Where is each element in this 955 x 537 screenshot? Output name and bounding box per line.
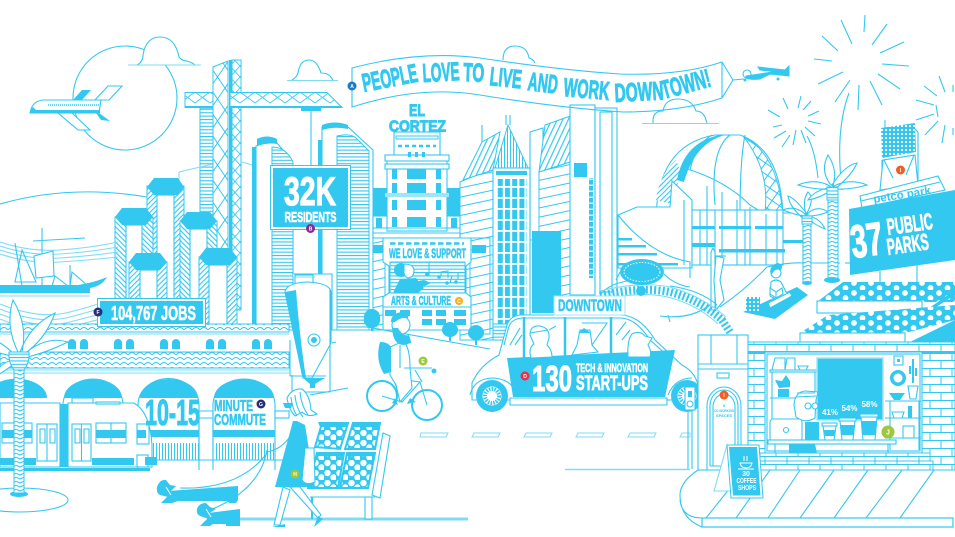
label: 10-15 minute commute: COMMUTE: [214, 412, 266, 429]
El Cortez lettering: EL: [409, 101, 425, 120]
musician: [393, 262, 458, 293]
road edge lines: [240, 470, 690, 519]
curb line with trees: [364, 309, 490, 349]
coffee cups chart: 41%: [822, 408, 838, 417]
passengers: [510, 322, 652, 358]
airplane: [30, 86, 122, 130]
bus: 130: [532, 358, 572, 399]
coworking door: [698, 335, 748, 470]
El Cortez lettering: CORTEZ: [389, 118, 446, 136]
Petco Park scoreboard: petco park: [873, 185, 932, 206]
sign: 32K residents: [270, 166, 350, 233]
banner: LIVE: [488, 61, 523, 94]
coworking door: CO-WORKING: [714, 408, 734, 413]
sign: arts and culture: ARTS & CULTURE: [391, 294, 451, 308]
lamp post: [711, 248, 726, 310]
dog: long dachshund: [157, 480, 238, 503]
bus: START-UPS: [576, 372, 648, 395]
cloud: upper left: [128, 37, 201, 65]
laptop: [770, 419, 802, 441]
shop shelves and decor: [770, 356, 921, 450]
sun: [73, 46, 177, 150]
palm tree: tall: [798, 155, 867, 283]
label: downtown: DOWNTOWN: [558, 296, 622, 315]
sign: 37 public parks: [847, 190, 955, 284]
El Cortez lettering: [389, 101, 446, 136]
Petco Park scoreboard: I: [900, 168, 902, 174]
coffee cups chart: [822, 400, 894, 440]
counter: [768, 440, 896, 453]
leashes: [180, 450, 268, 510]
banner: A: [350, 84, 354, 90]
planter: lower: [800, 305, 955, 342]
water waves: [0, 242, 118, 330]
banner: LOVE: [422, 56, 460, 88]
coworking door: 6: [723, 403, 726, 408]
cloud: right of banner: [642, 99, 719, 124]
barista: [794, 391, 819, 440]
hexagonal towers: [115, 178, 237, 326]
sign: arts and culture: [383, 238, 471, 330]
sailing ship: [0, 228, 107, 296]
planter: upper: [817, 282, 955, 314]
station backdrop: brick roofline: [0, 324, 289, 471]
bus: D: [523, 374, 527, 380]
label: 10-15 minute commute: G: [259, 402, 263, 408]
banner: WORK: [562, 72, 611, 106]
side walls of arts building: [373, 238, 490, 334]
sign: 104,767 jobs: F: [96, 310, 100, 316]
cyclist: [367, 312, 442, 420]
A-frame coffee sign: SHOPS: [738, 485, 756, 492]
tower crane: [179, 60, 342, 310]
sign: 104,767 jobs: 104,767 JOBS: [111, 303, 196, 325]
banner: TO: [463, 57, 485, 88]
produce stand: [308, 422, 390, 519]
brewery tank: [285, 274, 348, 395]
coffee cups chart: 58%: [861, 400, 878, 409]
label: 10-15 minute commute: 10-15: [145, 392, 200, 433]
pointed tower: [493, 115, 530, 340]
sign: 37 public parks: 37: [847, 212, 886, 268]
parking meter: [685, 387, 695, 469]
road dashes: [420, 433, 690, 437]
park paths: [600, 263, 860, 322]
coworking door: I: [723, 393, 725, 399]
residential tower right: [318, 122, 373, 330]
sign: arts and culture: WE LOVE & SUPPORT: [389, 246, 466, 261]
woman walking dogs: H: [293, 472, 297, 478]
cloud: above tower: [287, 60, 338, 80]
biplane: [733, 66, 789, 82]
ornamental arch band: [600, 285, 730, 332]
cyclist: E: [421, 359, 425, 365]
banner: TOWN!: [658, 63, 714, 105]
banner: [348, 56, 733, 112]
banner: PEOPLE: [359, 58, 420, 98]
coffee cups chart: J: [886, 430, 890, 436]
El Cortez building: [373, 132, 460, 238]
A-frame coffee sign: [714, 445, 763, 498]
sign: 104,767 jobs: [94, 298, 206, 326]
sign: 32K residents: RESIDENTS: [284, 209, 336, 226]
dome: [656, 135, 783, 222]
civic building and terraces: [617, 181, 803, 280]
picnic basket: [746, 297, 760, 311]
sign: 32K residents: B: [309, 226, 313, 232]
picnic blanket: [743, 287, 808, 319]
woman walking dogs: [266, 389, 323, 527]
coffee cups chart: 54%: [841, 404, 858, 413]
label: downtown: [554, 296, 625, 315]
blue block: [532, 231, 561, 313]
banner: DOWN: [614, 75, 664, 108]
banner: AND: [526, 66, 560, 100]
hill line: [0, 192, 147, 204]
sign: 32K residents: 32K: [284, 170, 336, 214]
fireworks: [768, 15, 953, 190]
station arches: [0, 379, 289, 470]
fountain oval: [616, 259, 690, 296]
palm tree: small: [783, 192, 828, 285]
left palm tree: [0, 300, 68, 512]
brick shop wall: [748, 342, 955, 470]
cloud: behind banner: [503, 46, 535, 63]
dog: short dachshund: [197, 503, 240, 526]
sidewalk: [680, 453, 953, 527]
bus: [470, 315, 703, 412]
A-frame coffee sign: COFFEE: [736, 478, 757, 485]
bus: TECH & INNOVATION: [576, 361, 648, 375]
light rail train: [0, 398, 157, 471]
tall blocks behind banner: [530, 105, 617, 300]
A-frame coffee sign: 30: [742, 471, 750, 478]
person reading: [768, 263, 792, 308]
coworking door: SPACES: [716, 413, 732, 418]
Petco Park scoreboard: [860, 120, 945, 208]
sign: arts and culture: C: [457, 299, 461, 305]
residential tower left: [252, 136, 293, 330]
skyscraper with slanted facade: [460, 125, 500, 340]
label: 10-15 minute commute: MINUTE: [214, 398, 253, 415]
